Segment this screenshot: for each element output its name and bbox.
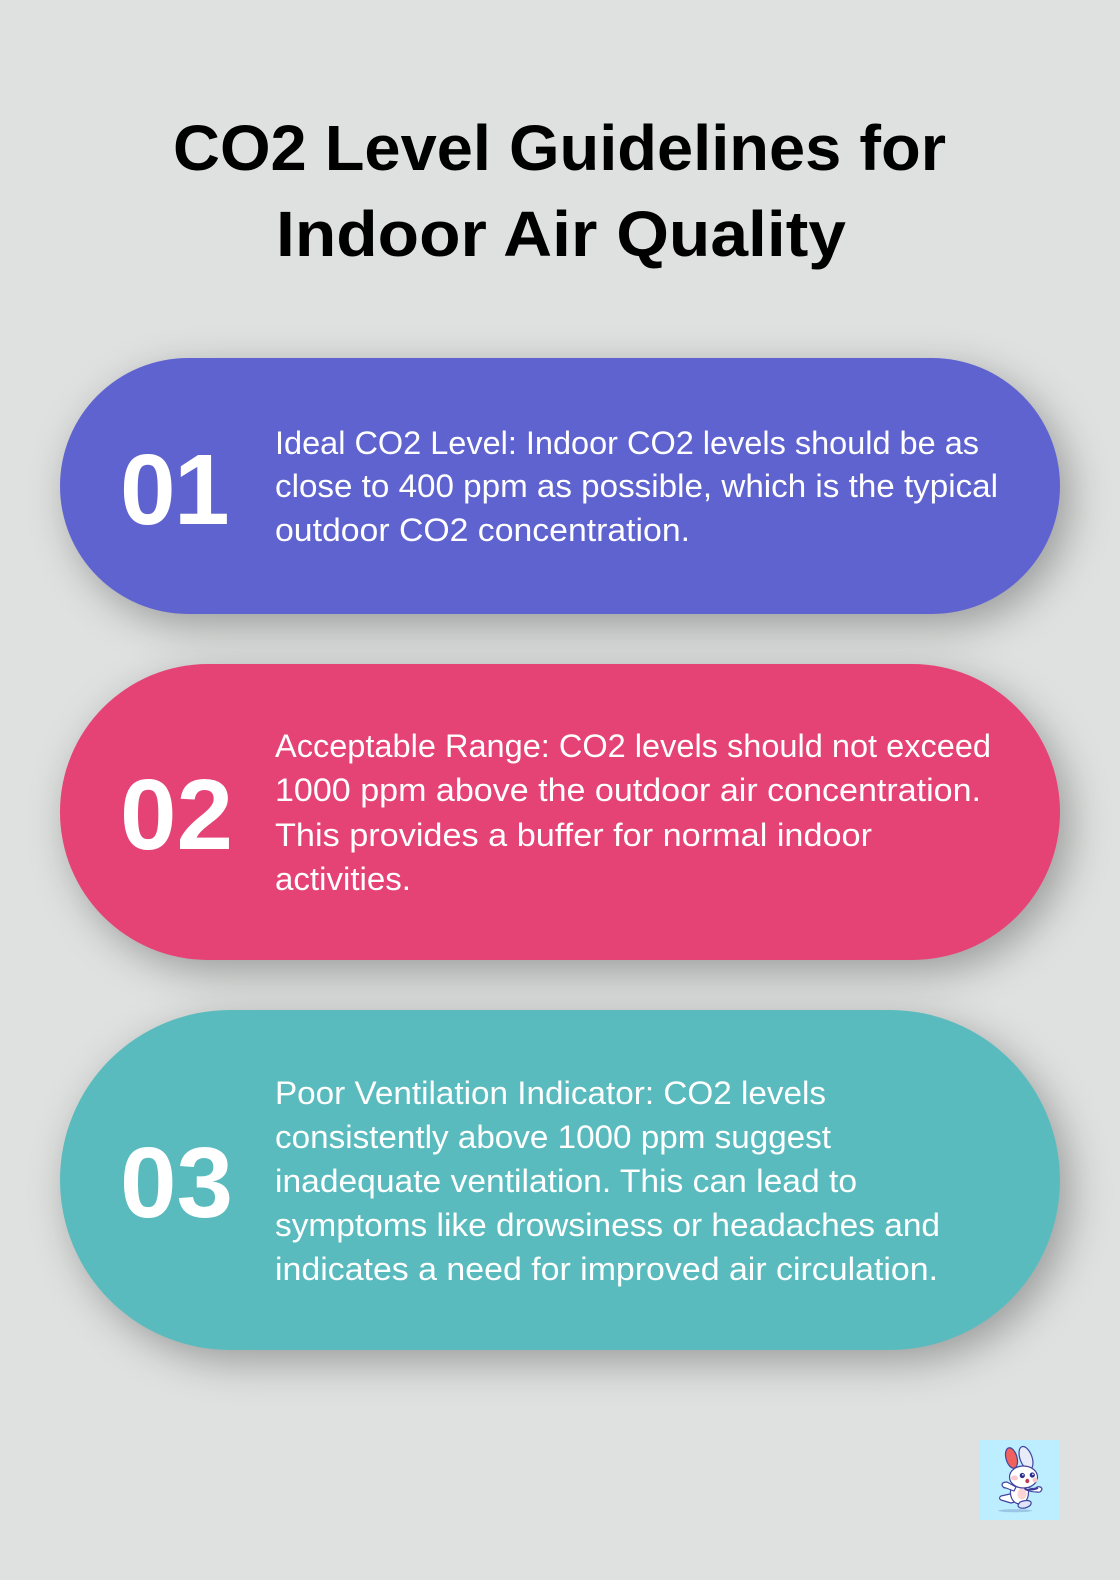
text block: ideal CO2 level: close to 400 ppm as possible, which is the typical: [275, 468, 998, 504]
text block: poor ventilation indicator: Poor Ventilation Indicator: CO2 levels: [275, 1075, 826, 1111]
panel: poor ventilation indicator: [60, 1010, 1060, 1350]
panel: ideal CO2 level: [60, 358, 1060, 614]
number 02: 02: [120, 759, 233, 871]
number 03: 03: [120, 1127, 233, 1239]
text block: acceptable range: activities.: [275, 861, 411, 897]
title: CO2 Level Guidelines for: [173, 112, 946, 184]
icon: running bunny logo: [980, 1440, 1060, 1520]
number 01: 01: [120, 434, 230, 546]
text block: acceptable range: [275, 728, 991, 897]
text block: acceptable range: 1000 ppm above the outdoor air concentration.: [275, 772, 981, 808]
text block: ideal CO2 level: Ideal CO2 Level: Indoor CO2 levels should be as: [275, 425, 979, 461]
text block: poor ventilation indicator: indicates a need for improved air circulation.: [275, 1251, 938, 1287]
text block: poor ventilation indicator: inadequate ventilation. This can lead to: [275, 1163, 857, 1199]
text block: acceptable range: This provides a buffer for normal indoor: [275, 817, 872, 853]
title: Indoor Air Quality: [276, 198, 846, 270]
text block: poor ventilation indicator: [275, 1075, 940, 1287]
text block: ideal CO2 level: outdoor CO2 concentration.: [275, 512, 690, 548]
text block: ideal CO2 level: [275, 425, 998, 548]
text block: acceptable range: Acceptable Range: CO2 levels should not exceed: [275, 728, 991, 764]
text block: poor ventilation indicator: consistently above 1000 ppm suggest: [275, 1119, 831, 1155]
panel: acceptable range: [60, 664, 1060, 960]
title: [173, 112, 946, 270]
text block: poor ventilation indicator: symptoms like drowsiness or headaches and: [275, 1207, 940, 1243]
